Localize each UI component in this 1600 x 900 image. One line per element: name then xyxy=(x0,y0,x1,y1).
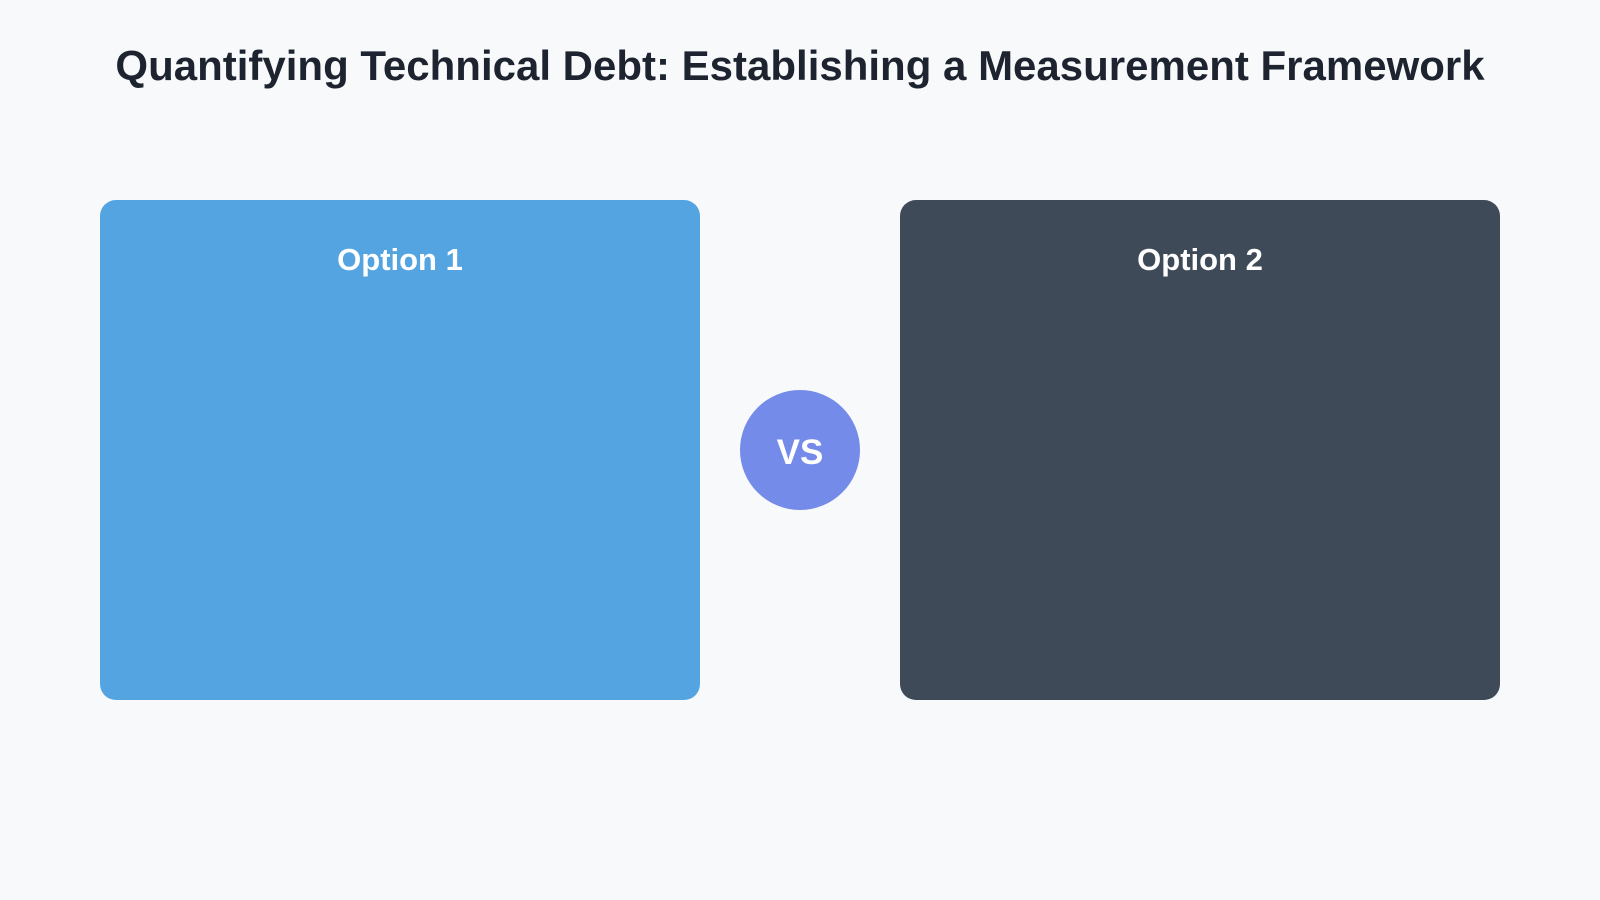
vs badge: VS xyxy=(777,433,823,472)
heading: option 1: Option 1 xyxy=(337,242,463,277)
vs badge xyxy=(740,390,860,510)
heading: option 2: Option 2 xyxy=(1137,242,1263,277)
panel: option 2 xyxy=(900,200,1500,700)
title: Quantifying Technical Debt: Establishing a Measurement Framework xyxy=(115,42,1485,89)
panel: option 1 xyxy=(100,200,700,700)
